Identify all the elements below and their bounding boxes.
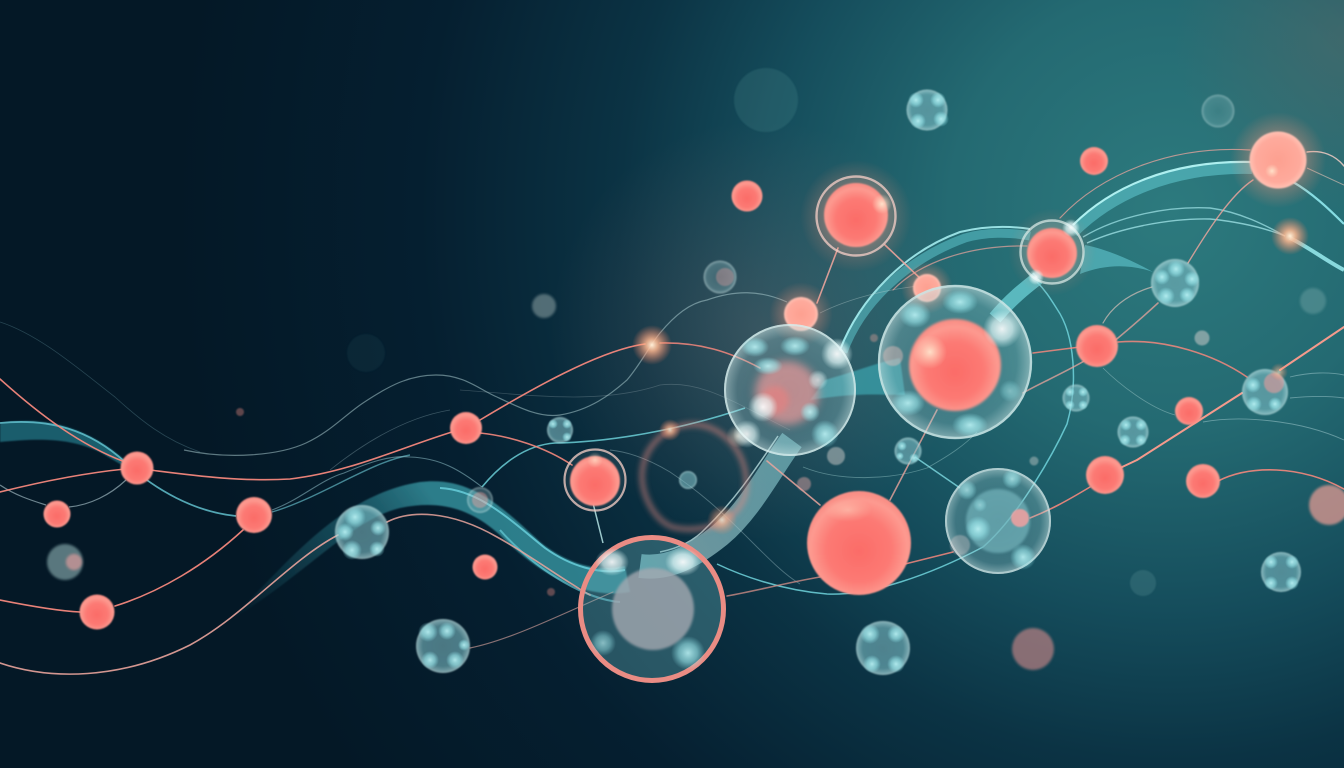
- ribbon: left wedge: [0, 421, 136, 472]
- ribbon: thin arcs upper right: [1083, 208, 1285, 237]
- large bubble with coral core, right centre: [878, 285, 1032, 439]
- ringed coral sphere top: [816, 176, 896, 256]
- faint glass bubble top right: [1202, 94, 1234, 128]
- ribbon: tube to upper right: [995, 278, 1038, 318]
- ribbon: lower left band: [230, 481, 630, 620]
- line: large teal loop: [717, 282, 1073, 594]
- teal ribbons: [0, 162, 1344, 620]
- pale coral sphere top right: [1250, 132, 1306, 188]
- faint coral ring: [642, 425, 746, 529]
- large bubble with pale core, centre: [724, 324, 856, 456]
- line: thin teal from small bubble: [482, 408, 745, 487]
- glow behind central cluster: [769, 112, 1326, 346]
- blurred pale spheres: [47, 288, 1344, 670]
- small glass bubbles: [335, 90, 1301, 675]
- ribbon: glass tube rising to centre: [640, 440, 792, 567]
- large coral-ringed bubble, bottom centre: [580, 538, 724, 680]
- coral connecting lines: [0, 149, 1344, 674]
- ribbon: band behind bubbles: [810, 358, 905, 400]
- small coral spheres: [44, 147, 1220, 630]
- lines: thin grey waves: [184, 293, 787, 455]
- highlights on small bubbles: [336, 92, 1299, 673]
- large bubble with glass core, lower right: [945, 468, 1051, 574]
- ringed coral sphere upper right: [1020, 219, 1084, 285]
- faint blurred background bubbles: [236, 68, 1210, 596]
- large coral sphere: [807, 491, 911, 595]
- ringed coral sphere centre left: [564, 450, 626, 510]
- spark glows: [632, 217, 1309, 535]
- ribbon: central arc: [843, 233, 1030, 352]
